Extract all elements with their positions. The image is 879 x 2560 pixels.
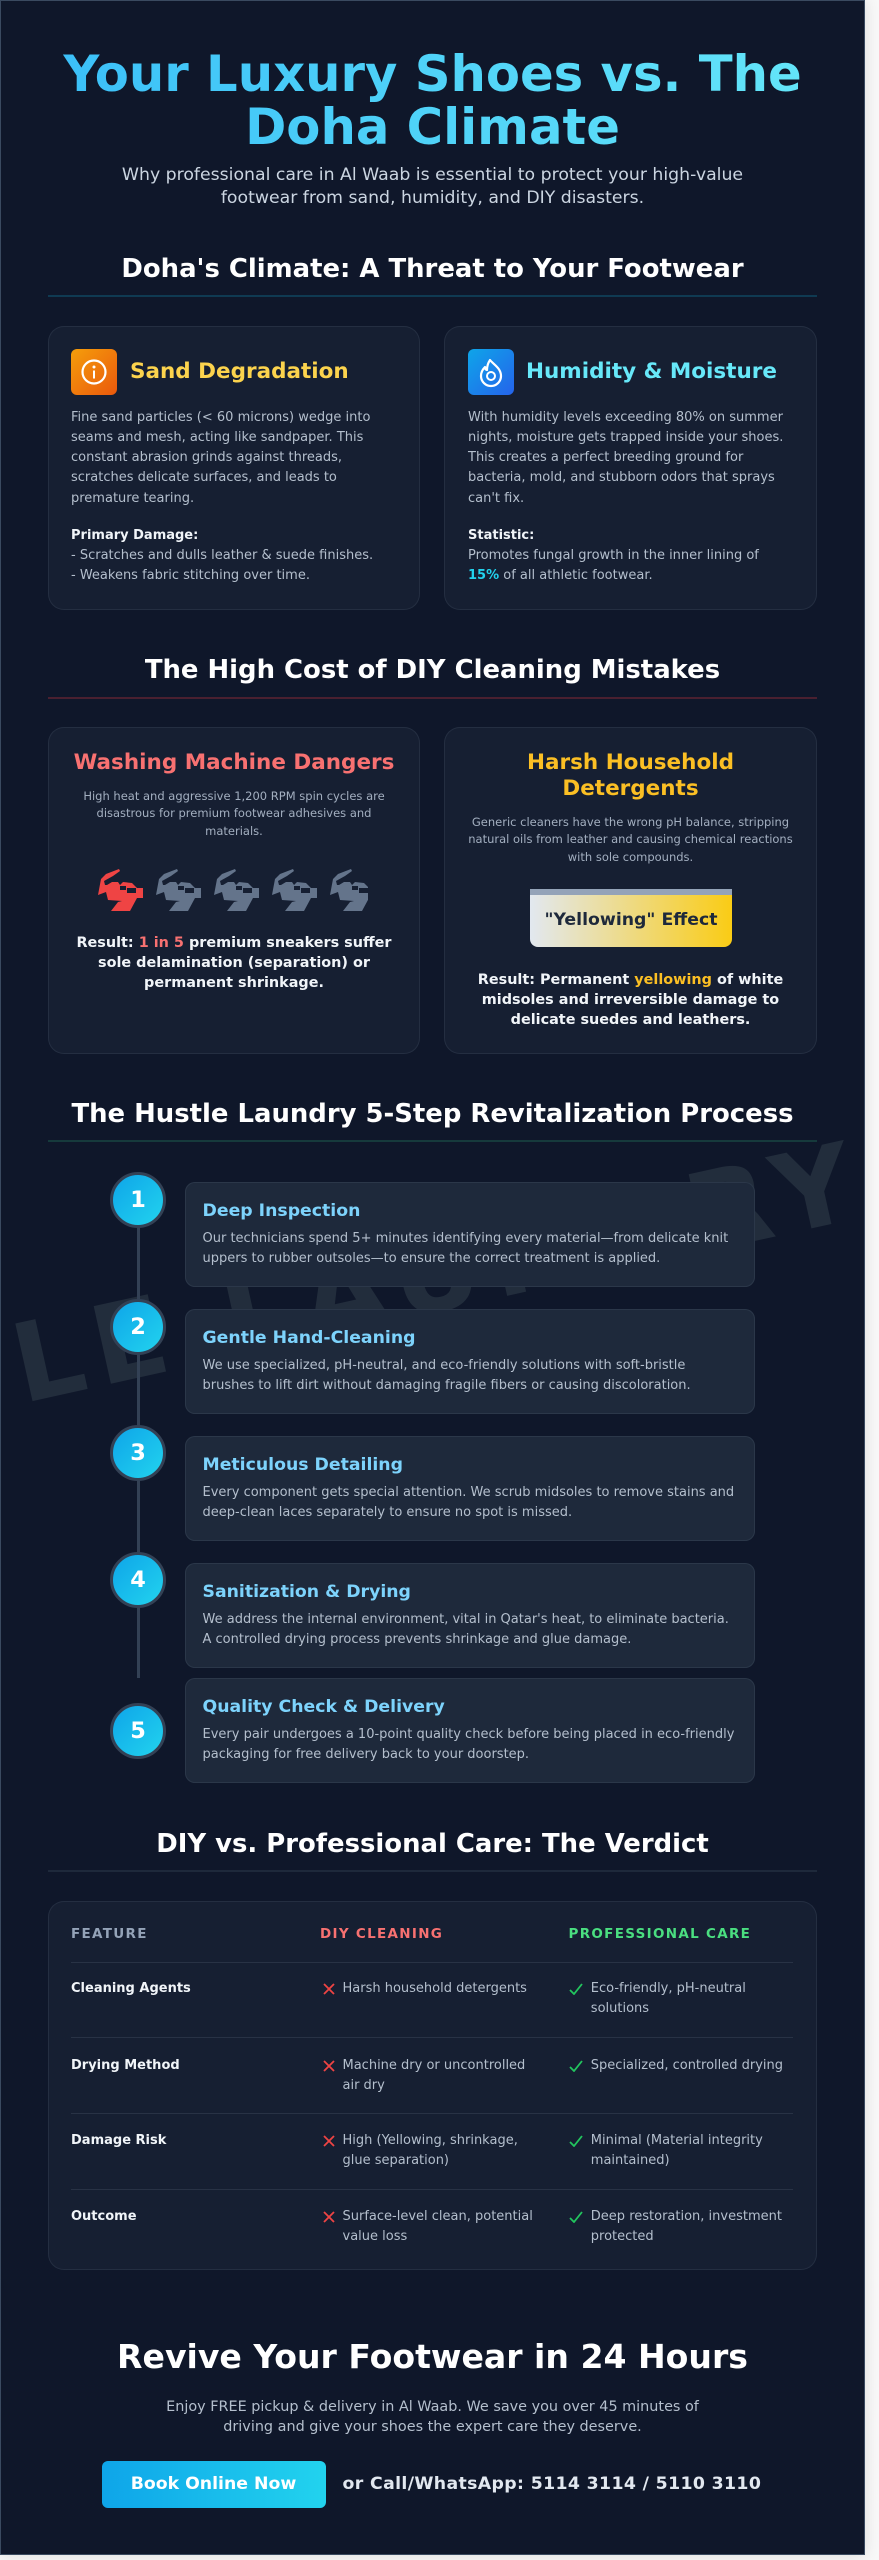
body text: [71, 410, 370, 506]
body text: seams and mesh, acting like sandpaper. This: [71, 430, 363, 445]
statistic: [468, 528, 760, 583]
row: damage risk: High (Yellowing, shrinkage,: [342, 2133, 518, 2148]
result text: midsoles and irreversible damage to: [482, 992, 779, 1008]
CTA heading: Revive Your Footwear in 24 Hours: [117, 2337, 748, 2376]
result text: sole delamination (separation) or: [98, 955, 370, 971]
icon: shoe grey: [214, 869, 259, 911]
section heading: DIY mistakes: The High Cost of DIY Cleaning Mistakes: [145, 655, 720, 685]
row: drying method: Drying Method: [71, 2058, 180, 2073]
table headers: [71, 1926, 751, 1942]
title: Doha Climate: [245, 98, 620, 156]
icon: shoe grey: [330, 869, 375, 911]
icon: shoe grey: [272, 869, 317, 911]
subtitle: Why professional care in Al Waab is essential to protect your high-value: [122, 165, 743, 185]
row: outcome: Outcome: [71, 2209, 137, 2224]
row: outcome: value loss: [342, 2229, 407, 2244]
step number 2: [110, 1298, 166, 1354]
body text: natural oils from leather and causing chemical reactions: [468, 832, 793, 846]
icon row: 1 in 5 shoes: [98, 869, 368, 911]
body text: bacteria, mold, and stubborn odors that sprays: [468, 470, 775, 485]
statistic: 15% of all athletic footwear.: [468, 568, 653, 583]
body text: materials.: [205, 824, 263, 838]
step 4: sanitization and drying: A controlled drying process prevents shrinkage and glue damage.: [202, 1632, 631, 1647]
step number 2: 2: [130, 1314, 146, 1340]
row: cleaning agents: solutions: [591, 2001, 649, 2016]
row: cleaning agents: Cleaning Agents: [71, 1981, 191, 1996]
step number 4: 4: [130, 1567, 146, 1593]
row: drying method: Machine dry or uncontrolled: [342, 2058, 525, 2073]
row: cleaning agents: Harsh household detergents: [342, 1981, 527, 1996]
heading: humidity: Humidity & Moisture: [526, 359, 777, 384]
table headers: PROFESSIONAL CARE: [568, 1926, 751, 1942]
step 2: gentle hand-cleaning: We use specialized, pH-neutral, and eco-friendly solutions with soft-bristle: [202, 1358, 685, 1373]
heading: harsh detergents: Detergents: [562, 776, 699, 801]
step number 5: [110, 1702, 166, 1758]
step number 5: 5: [130, 1718, 146, 1744]
row: drying method: air dry: [342, 2078, 385, 2093]
timeline line: [137, 1172, 140, 1678]
row: outcome: Deep restoration, investment: [591, 2209, 782, 2224]
panel: sand degradation: [48, 326, 420, 610]
table headers: DIY CLEANING: [320, 1926, 443, 1942]
icon: sand info: [71, 349, 117, 395]
row: outcome: protected: [591, 2229, 654, 2244]
section heading: climate: Doha's Climate: A Threat to Your Footwear: [121, 254, 744, 284]
heading: harsh detergents: [527, 750, 734, 801]
result text: [478, 972, 783, 1028]
row: cleaning agents: Eco-friendly, pH-neutral: [591, 1981, 746, 1996]
panel: harsh detergents: [444, 727, 817, 1054]
section heading: verdict: DIY vs. Professional Care: The Verdict: [156, 1829, 709, 1859]
process timeline: [110, 1172, 755, 1783]
step 5: quality check and delivery: [184, 1678, 754, 1783]
body text: scratches delicate surfaces, and leads to: [71, 470, 337, 485]
primary damage list: - Scratches and dulls leather & suede finishes.: [71, 548, 373, 563]
header: [63, 45, 802, 208]
step number 3: 3: [130, 1440, 146, 1466]
body text: [468, 410, 783, 506]
yellowing effect swatch: "Yellowing" Effect: [544, 910, 717, 930]
icon: shoe red: [98, 869, 143, 911]
step 4: sanitization and drying: Sanitization & Drying: [202, 1582, 411, 1602]
step 2: gentle hand-cleaning: [184, 1309, 754, 1414]
result text: delicate suedes and leathers.: [511, 1012, 750, 1028]
contact numbers: or Call/WhatsApp: 5114 3114 / 5110 3110: [342, 2474, 761, 2494]
body text: [468, 815, 793, 864]
icon: shoe grey: [156, 869, 201, 911]
result text: permanent shrinkage.: [144, 975, 324, 991]
step 2: gentle hand-cleaning: Gentle Hand-Cleaning: [202, 1328, 416, 1348]
step 4: sanitization and drying: [184, 1562, 754, 1668]
body text: Fine sand particles (< 60 microns) wedge into: [71, 410, 370, 424]
button: book online: Book Online Now: [131, 2474, 296, 2494]
table headers: FEATURE: [71, 1926, 148, 1942]
panel: humidity and moisture: [444, 326, 817, 610]
body text: premature tearing.: [71, 490, 194, 506]
step number 4: [110, 1552, 166, 1608]
step 5: quality check and delivery: Quality Check & Delivery: [202, 1697, 445, 1717]
step number 1: [110, 1172, 166, 1228]
step 1: deep inspection: [184, 1182, 754, 1287]
step 1: deep inspection: uppers to rubber outsoles—to ensure the correct treatment is applied.: [202, 1251, 660, 1266]
body text: Generic cleaners have the wrong pH balance, stripping: [472, 815, 789, 829]
body text: [83, 789, 385, 838]
row: damage risk: Damage Risk: [71, 2133, 166, 2148]
result text: [76, 935, 392, 991]
body text: With humidity levels exceeding 80% on summer: [468, 410, 783, 424]
body text: can't fix.: [468, 490, 524, 506]
step 3: meticulous detailing: [184, 1436, 754, 1541]
body text: This creates a perfect breeding ground for: [468, 450, 743, 465]
body text: disastrous for premium footwear adhesives and: [97, 806, 371, 820]
body text: nights, moisture gets trapped inside your shoes.: [468, 430, 783, 445]
step 1: deep inspection: Deep Inspection: [202, 1201, 360, 1221]
step 3: meticulous detailing: deep-clean laces separately to ensure no spot is missed.: [202, 1505, 572, 1520]
step 1: deep inspection: Our technicians spend 5+ minutes identifying every material—from delicate knit: [202, 1231, 728, 1246]
result text: Result: Permanent yellowing of white: [478, 972, 783, 988]
step 2: gentle hand-cleaning: brushes to lift dirt without damaging fragile fibers or causing discoloration.: [202, 1378, 691, 1393]
primary damage list: Primary Damage:: [71, 528, 198, 543]
row: drying method: Specialized, controlled drying: [591, 2058, 783, 2073]
row: outcome: [71, 2209, 782, 2244]
heading: sand degradation: Sand Degradation: [130, 359, 349, 384]
primary damage list: [71, 528, 373, 583]
row: cleaning agents: [71, 1981, 746, 2016]
step number 3: [110, 1425, 166, 1481]
row: damage risk: glue separation): [342, 2153, 449, 2168]
yellowing effect swatch: [530, 889, 732, 947]
subtitle: [122, 165, 743, 208]
CTA text: driving and give your shoes the expert care they deserve.: [223, 2419, 642, 2435]
row: drying method: [71, 2058, 783, 2093]
panel: washing machine dangers: [48, 727, 420, 1054]
section heading: process: The Hustle Laundry 5-Step Revitalization Process: [71, 1099, 794, 1129]
row: damage risk: Minimal (Material integrity: [591, 2133, 763, 2148]
step 5: quality check and delivery: packaging for free delivery back to your doorstep.: [202, 1747, 529, 1762]
body text: High heat and aggressive 1,200 RPM spin cycles are: [83, 789, 385, 803]
body text: with sole compounds.: [568, 850, 693, 864]
CTA text: [166, 2399, 700, 2435]
heading: washing machine: Washing Machine Dangers: [74, 750, 394, 775]
result text: Result: 1 in 5 premium sneakers suffer: [76, 935, 392, 951]
body text: constant abrasion grinds against threads,: [71, 450, 342, 465]
step 4: sanitization and drying: We address the internal environment, vital in Qatar's heat, to eliminate bacteria.: [202, 1612, 729, 1626]
CTA text: Enjoy FREE pickup & delivery in Al Waab. We save you over 45 minutes of: [166, 2399, 699, 2415]
title: [0, 48, 865, 154]
step 3: meticulous detailing: Meticulous Detailing: [202, 1455, 403, 1475]
subtitle: footwear from sand, humidity, and DIY disasters.: [221, 188, 644, 208]
title: Your Luxury Shoes vs. The: [63, 45, 802, 103]
step 5: quality check and delivery: Every pair undergoes a 10-point quality check before being placed in eco-friendly: [202, 1727, 734, 1742]
icon: moisture drop: [468, 349, 514, 395]
row: outcome: Surface-level clean, potential: [342, 2209, 533, 2224]
step number 1: 1: [130, 1187, 146, 1213]
heading: harsh detergents: Harsh Household: [527, 750, 734, 775]
primary damage list: - Weakens fabric stitching over time.: [71, 568, 310, 583]
row: damage risk: maintained): [591, 2153, 670, 2168]
row: damage risk: [71, 2133, 763, 2168]
button: book online: [102, 2461, 326, 2508]
statistic: Statistic:: [468, 528, 534, 543]
step 3: meticulous detailing: Every component gets special attention. We scrub midsoles to remove stains and: [202, 1485, 734, 1500]
call to action: [102, 2337, 761, 2508]
statistic: Promotes fungal growth in the inner lining of: [468, 548, 759, 563]
comparison table: [48, 1901, 817, 2270]
